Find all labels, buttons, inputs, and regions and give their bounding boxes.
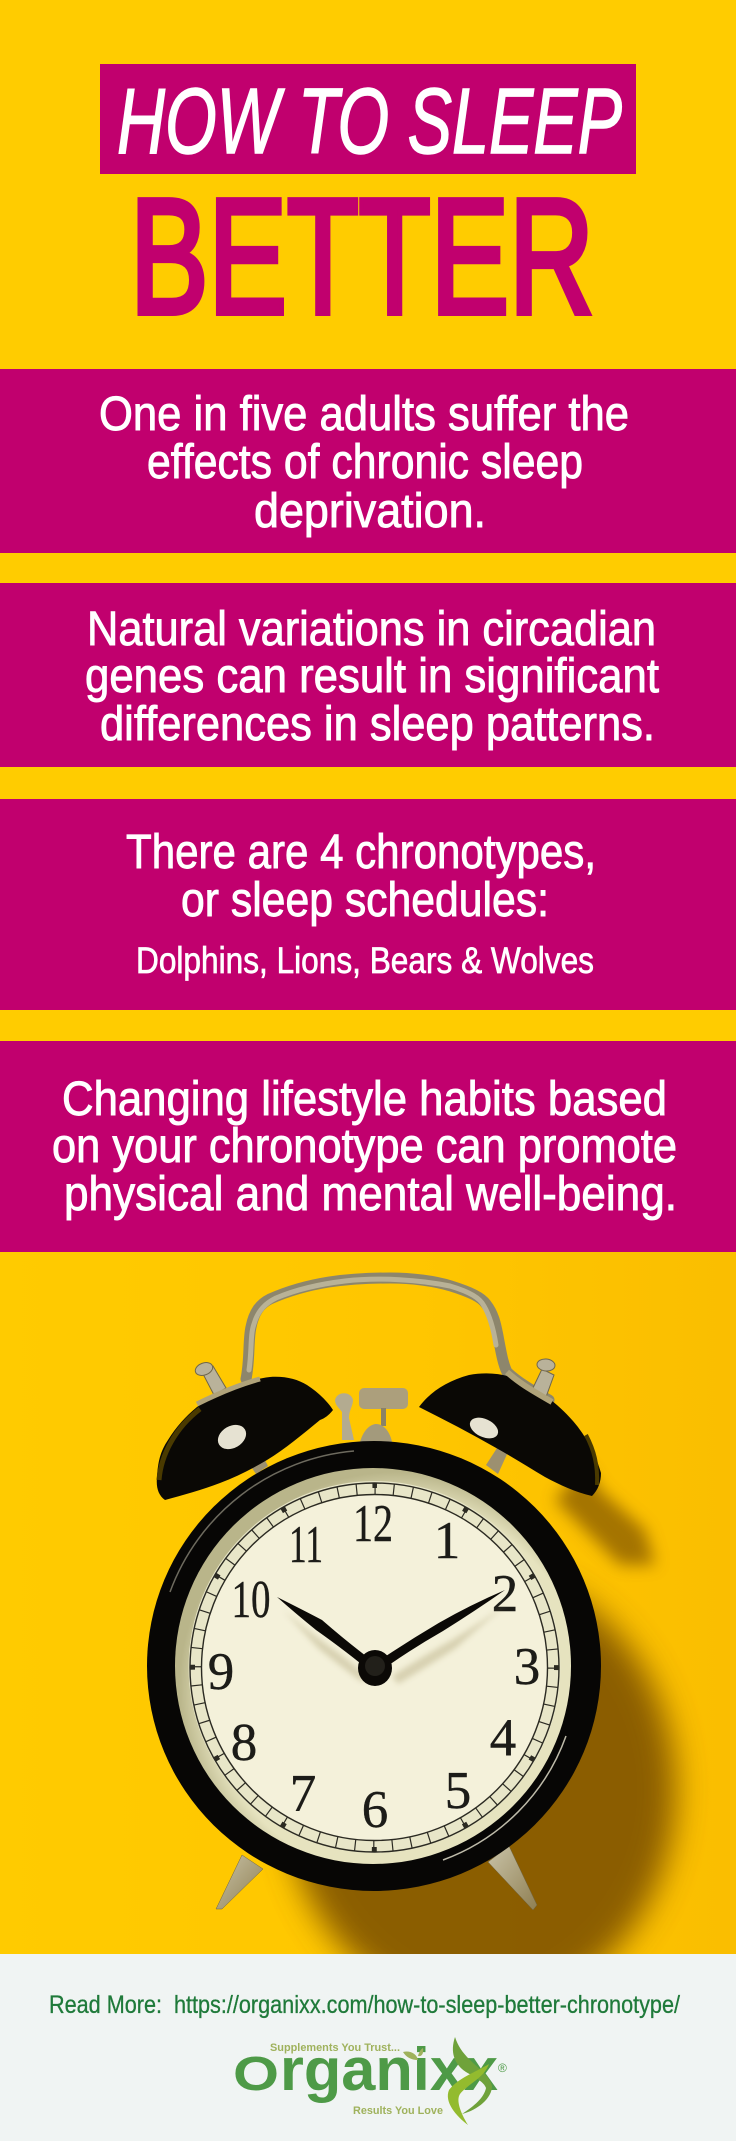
organixx logo: Supplements You Trust... — [270, 2042, 400, 2054]
clock body — [147, 1441, 601, 1891]
bell finials — [193, 1358, 555, 1397]
panel: chronic sleep deprivation fact: effects of chronic sleep — [147, 436, 583, 489]
clock numerals: 3 — [514, 1638, 540, 1696]
clock numerals: 9 — [208, 1643, 234, 1701]
panel: chronic sleep deprivation fact: One in five adults suffer the — [99, 388, 629, 441]
panel: chronic sleep deprivation fact: deprivation. — [254, 485, 486, 538]
organixx logo: ® — [498, 2061, 507, 2075]
clock numerals: 11 — [289, 1516, 323, 1574]
clock numerals: 10 — [232, 1571, 270, 1629]
panel: circadian genes fact — [0, 583, 736, 767]
bell posts — [242, 1445, 508, 1474]
hand pin — [358, 1650, 392, 1686]
organixx logo: Results You Love — [353, 2105, 443, 2117]
panel: alarm clock photo — [147, 1252, 736, 1954]
panel: four chronotypes fact: There are 4 chronotypes, — [126, 826, 596, 879]
clock shadow — [284, 1465, 676, 2010]
clock feet — [216, 1846, 537, 1910]
clock numerals: 7 — [290, 1765, 316, 1823]
clock numerals: 2 — [492, 1565, 518, 1623]
panel: lifestyle habits fact: physical and mental well-being. — [64, 1168, 677, 1221]
panel: lifestyle habits fact: on your chronotype can promote — [52, 1120, 677, 1173]
panel: lifestyle habits fact — [0, 1041, 736, 1252]
alarm key and knob — [335, 1388, 408, 1442]
clock numerals: 4 — [490, 1709, 516, 1767]
title — [100, 64, 636, 348]
panel: four chronotypes fact — [0, 799, 736, 1010]
clock numerals: 1 — [434, 1512, 460, 1570]
clock hands — [277, 1590, 505, 1665]
minute track — [190, 1483, 559, 1852]
clock numerals — [208, 1495, 540, 1839]
panel: four chronotypes fact: or sleep schedules: — [181, 874, 549, 927]
panel: four chronotypes fact: Dolphins, Lions, Bears & Wolves — [136, 940, 594, 981]
panel: lifestyle habits fact: Changing lifestyle habits based — [62, 1073, 667, 1126]
organixx logo: rganixx — [280, 2036, 498, 2103]
panel: circadian genes fact: Natural variations in circadian — [87, 603, 656, 656]
clock face — [202, 1494, 548, 1840]
panel: footer — [0, 1954, 736, 2141]
panel: chronic sleep deprivation fact — [0, 369, 736, 553]
left bell — [157, 1377, 333, 1500]
organixx logo: O — [233, 2048, 279, 2101]
organixx logo — [233, 2036, 507, 2125]
clock numerals: 12 — [353, 1495, 393, 1553]
clock numerals: 5 — [445, 1762, 471, 1820]
right bell — [419, 1372, 601, 1496]
panel: circadian genes fact: genes can result in significant — [85, 650, 659, 703]
clock numerals: 8 — [231, 1714, 257, 1772]
hand shadows — [283, 1600, 512, 1684]
handle — [246, 1278, 549, 1400]
clock numerals: 6 — [362, 1781, 388, 1839]
panel: circadian genes fact: differences in sleep patterns. — [100, 698, 655, 751]
